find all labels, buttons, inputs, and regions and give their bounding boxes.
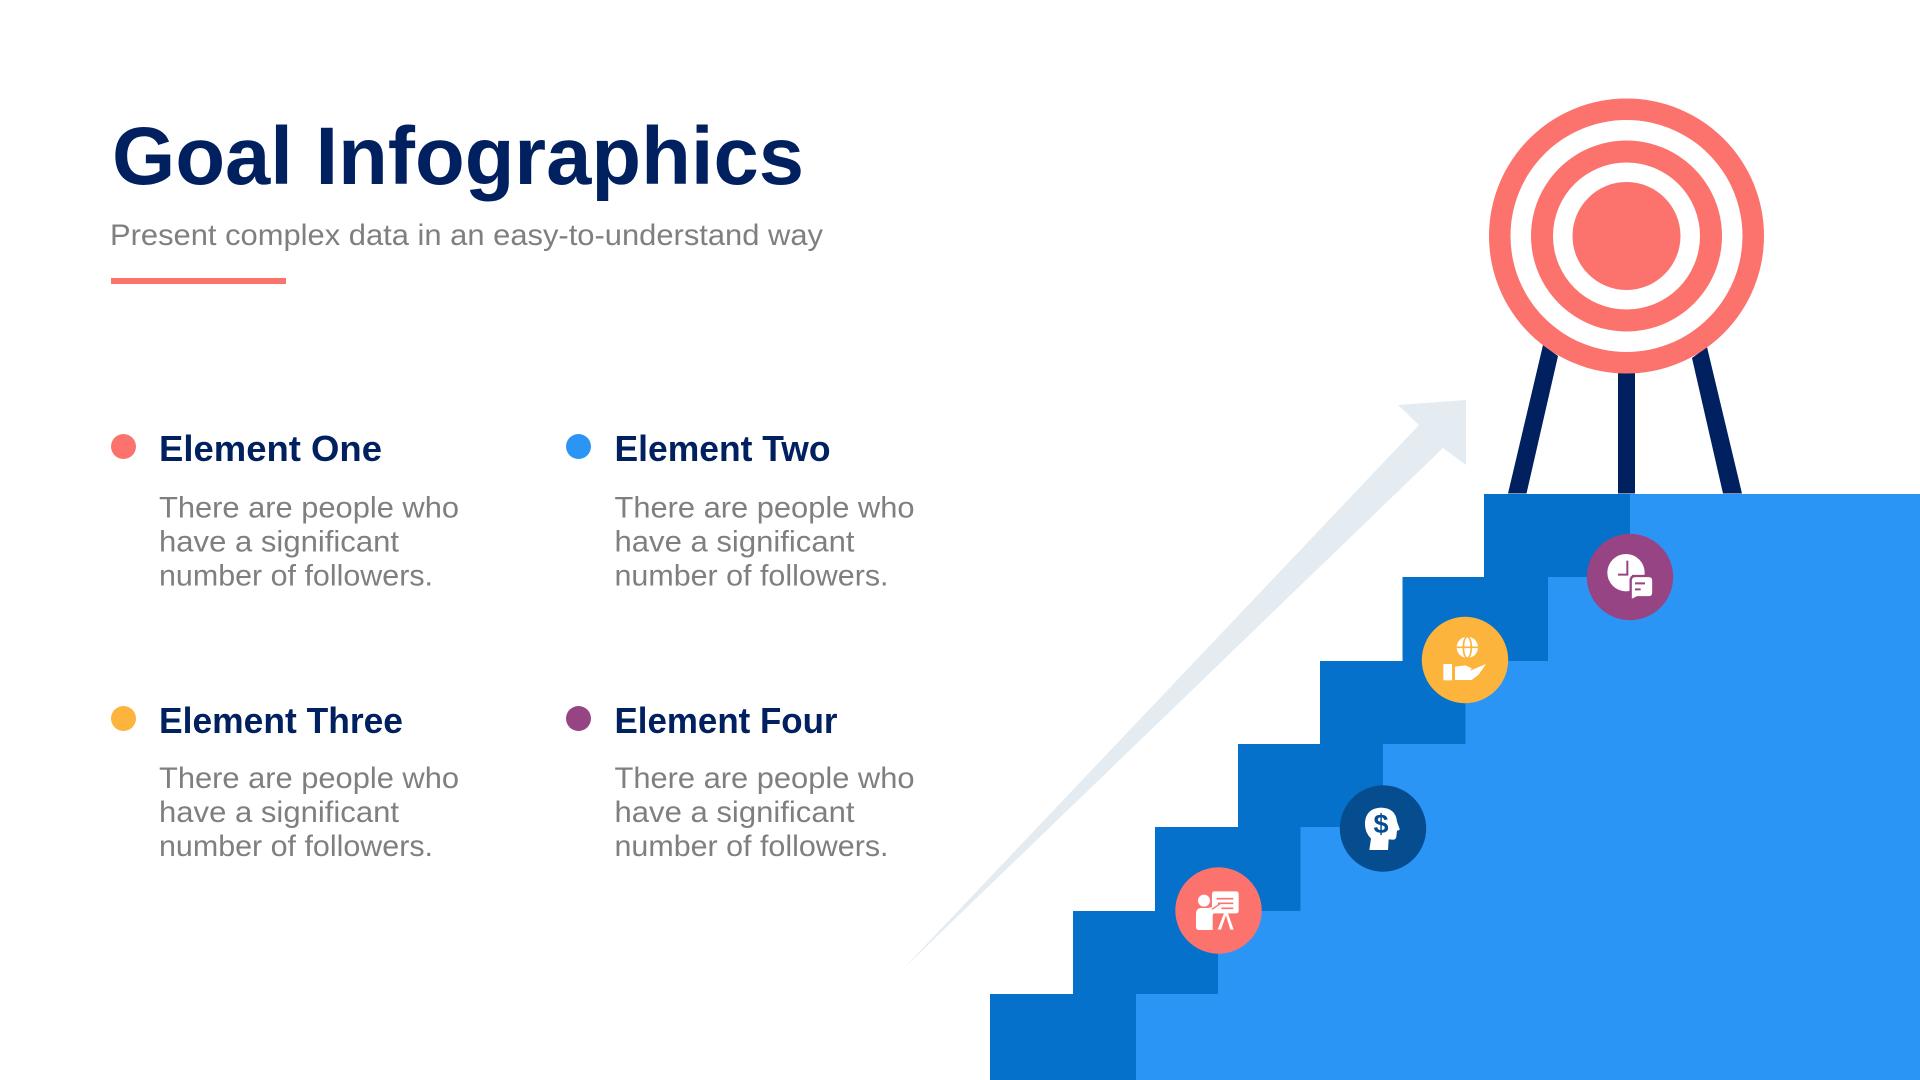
icon: clock and chat bubble — [1587, 534, 1673, 620]
title underline accent — [111, 278, 286, 284]
panel: element two — [566, 428, 914, 592]
icon: head with dollar sign: $ — [1373, 809, 1389, 839]
target legs — [1508, 345, 1742, 494]
target rings — [1489, 98, 1764, 374]
icon: presenter at board — [1175, 867, 1262, 954]
text: element three — [159, 762, 459, 863]
text: element one — [159, 492, 459, 592]
heading: element three: Element Three — [159, 700, 403, 741]
text: element three: have a significant — [159, 796, 400, 829]
text: element one: There are people who — [159, 492, 459, 524]
bullet: element two — [566, 434, 591, 459]
text: element three: number of followers. — [159, 830, 433, 863]
text: element one: have a significant — [159, 526, 400, 558]
text: element one: number of followers. — [159, 560, 433, 592]
text: element two: number of followers. — [614, 560, 888, 592]
heading: element two: Element Two — [614, 428, 830, 469]
panel: element three — [111, 700, 459, 863]
panel: element four — [566, 700, 914, 863]
subtitle: Present complex data in an easy-to-understand way — [110, 219, 823, 252]
text: element three: There are people who — [159, 762, 459, 795]
text: element two: There are people who — [614, 492, 914, 524]
icon: head with dollar sign — [1340, 785, 1426, 872]
text: element four: There are people who — [614, 762, 914, 795]
text: element two: have a significant — [614, 526, 855, 558]
bullet: element one — [111, 434, 136, 459]
target on stand — [1489, 98, 1764, 494]
heading: element four: Element Four — [614, 700, 838, 741]
text: element four: number of followers. — [614, 830, 888, 863]
stairs: light body — [1136, 494, 1920, 1080]
stairs: dark risers — [990, 494, 1630, 1080]
heading: element one: Element One — [159, 428, 382, 469]
bullet: element three — [111, 706, 136, 731]
text: element two — [614, 492, 914, 592]
bullet: element four — [566, 706, 591, 731]
icon: hand holding globe — [1422, 617, 1508, 703]
panel: element one — [111, 428, 459, 592]
text: element four: have a significant — [614, 796, 855, 829]
title: Goal Infographics — [112, 111, 804, 202]
text: element four — [614, 762, 914, 863]
arrow: rising trend — [903, 400, 1466, 969]
staircase — [990, 494, 1920, 1080]
